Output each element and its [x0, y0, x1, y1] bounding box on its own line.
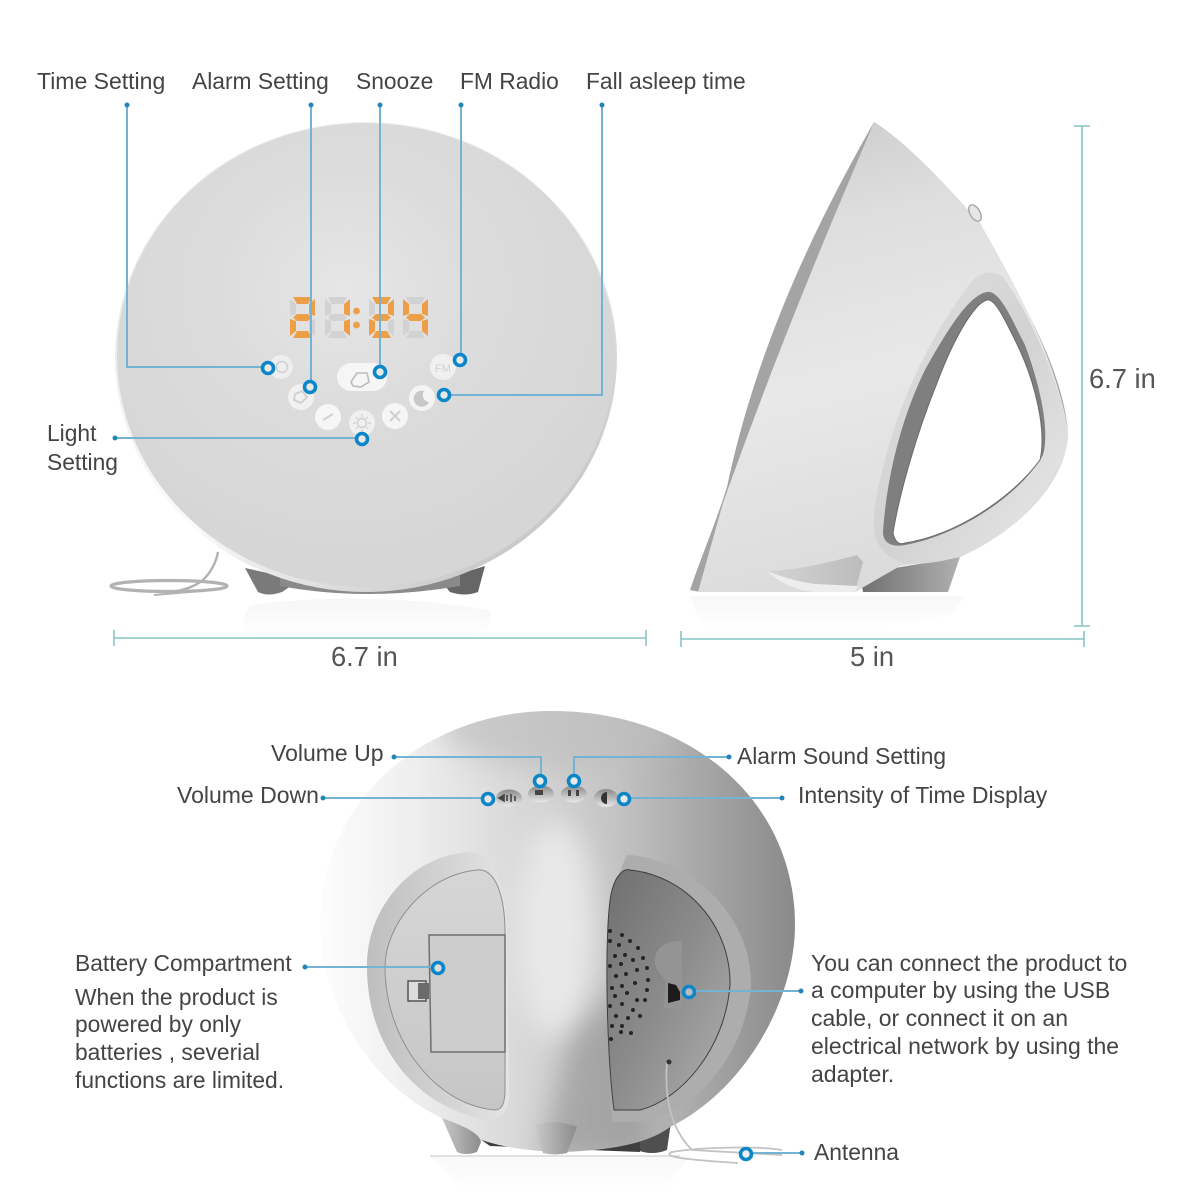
dimension labels: 6.7 in — [1089, 363, 1156, 394]
labels: top row: FM Radio — [460, 68, 559, 94]
side handle ring — [874, 273, 1068, 564]
text: usb note — [811, 950, 1127, 1087]
rear view of clock — [358, 711, 795, 1164]
labels: top row: Snooze — [356, 68, 433, 94]
callout lines — [115, 105, 802, 1153]
control buttons: FM — [435, 363, 451, 375]
clock digits 21:24 — [290, 297, 428, 338]
connector panel with speaker — [607, 870, 730, 1110]
dimension lines — [114, 126, 1090, 647]
labels: top row: Alarm Setting — [192, 68, 329, 94]
labels: rear buttons: Volume Up — [271, 740, 384, 766]
front view of clock — [111, 122, 617, 640]
labels: top row: Time Setting — [37, 68, 165, 94]
top buttons — [496, 786, 618, 807]
battery compartment panel — [385, 870, 505, 1110]
dimension labels: 5 in — [850, 641, 894, 672]
front feet — [245, 566, 485, 594]
side top button — [966, 203, 984, 223]
side handle cutout — [883, 292, 1045, 546]
labels: rear buttons: Intensity of Time Display — [798, 782, 1048, 808]
antenna wire — [111, 552, 227, 595]
text: battery compartment: functions are limited. — [75, 1067, 284, 1093]
rear right dark foot — [625, 1122, 671, 1153]
dimension labels — [331, 363, 1156, 672]
side view of clock — [690, 122, 1068, 631]
dimension labels: 6.7 in — [331, 641, 398, 672]
text: usb note: You can connect the product to — [811, 950, 1127, 976]
rear feet — [442, 1118, 577, 1154]
left recess — [367, 852, 509, 1120]
text: usb note: electrical network by using the — [811, 1033, 1119, 1059]
text: usb note: a computer by using the USB — [811, 977, 1110, 1003]
text: battery compartment: When the product is — [75, 984, 278, 1010]
label: antenna: Antenna — [814, 1139, 899, 1165]
text: battery compartment — [75, 950, 292, 1093]
side stand — [767, 555, 863, 592]
text: battery compartment: batteries , severial — [75, 1039, 260, 1065]
label: light setting: Light — [47, 420, 97, 446]
labels: top row: Fall asleep time — [586, 68, 746, 94]
labels: rear buttons: Volume Down — [177, 782, 319, 808]
text: battery compartment: Battery Compartment — [75, 950, 292, 976]
label: light setting: Setting — [47, 449, 118, 475]
text: battery compartment: powered by only — [75, 1011, 242, 1037]
text: usb note: cable, or connect it on an — [811, 1005, 1068, 1031]
labels: rear buttons — [177, 740, 1048, 808]
label: light setting — [47, 420, 118, 475]
antenna — [666, 1060, 782, 1163]
control buttons — [269, 354, 456, 436]
labels: top row — [37, 68, 746, 94]
text: usb note: adapter. — [811, 1061, 894, 1087]
right recess — [608, 855, 751, 1122]
side dark base — [860, 557, 960, 592]
labels: rear buttons: Alarm Sound Setting — [737, 743, 946, 769]
